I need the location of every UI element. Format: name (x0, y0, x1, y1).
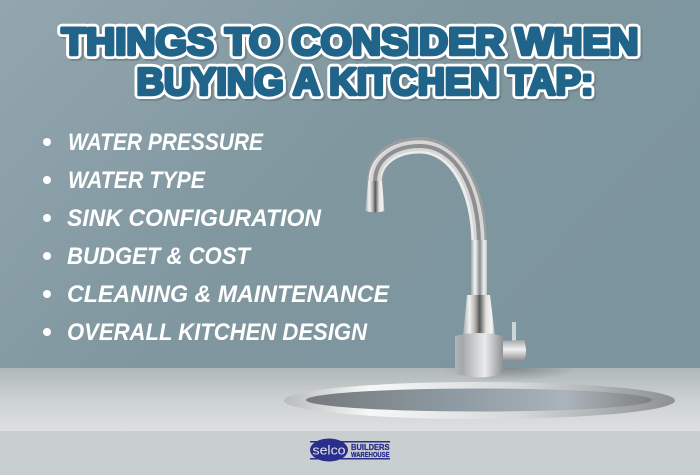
tap base (455, 333, 503, 378)
tap collar (463, 295, 495, 338)
title: BUYING A KITCHEN TAP: (136, 62, 594, 104)
item: water pressure: WATER PRESSURE (68, 129, 264, 156)
wall background (0, 0, 700, 368)
item: water type: WATER TYPE (68, 167, 206, 194)
countertop (0, 368, 700, 475)
bullet list (43, 129, 390, 346)
logo: selco builders warehouse: BUILDERS (351, 442, 390, 452)
title: BUYING A KITCHEN TAP: (138, 64, 596, 106)
logo: selco builders warehouse (310, 438, 390, 462)
sink (284, 382, 675, 419)
title: THINGS TO CONSIDER WHEN (64, 24, 640, 66)
tap handle (500, 340, 526, 361)
item: overall kitchen design: OVERALL KITCHEN DESIGN (67, 319, 368, 346)
logo: selco builders warehouse: WAREHOUSE (351, 452, 390, 459)
item: sink configuration: SINK CONFIGURATION (67, 205, 322, 232)
icon: kitchen tap (366, 145, 526, 378)
title: THINGS TO CONSIDER WHEN (62, 22, 638, 64)
tap gooseneck (375, 145, 479, 296)
tap shadow on counter (454, 368, 566, 379)
title (62, 22, 640, 106)
item: budget and cost: BUDGET & COST (67, 243, 252, 270)
item: cleaning and maintenance: CLEANING & MAINTENANCE (67, 281, 390, 308)
logo: selco builders warehouse: selco (312, 442, 346, 458)
title: BUYING A KITCHEN TAP: (136, 62, 594, 104)
tap stem (471, 240, 487, 296)
title: THINGS TO CONSIDER WHEN (62, 22, 638, 64)
tap spout (366, 181, 384, 212)
tap lever (512, 322, 516, 341)
